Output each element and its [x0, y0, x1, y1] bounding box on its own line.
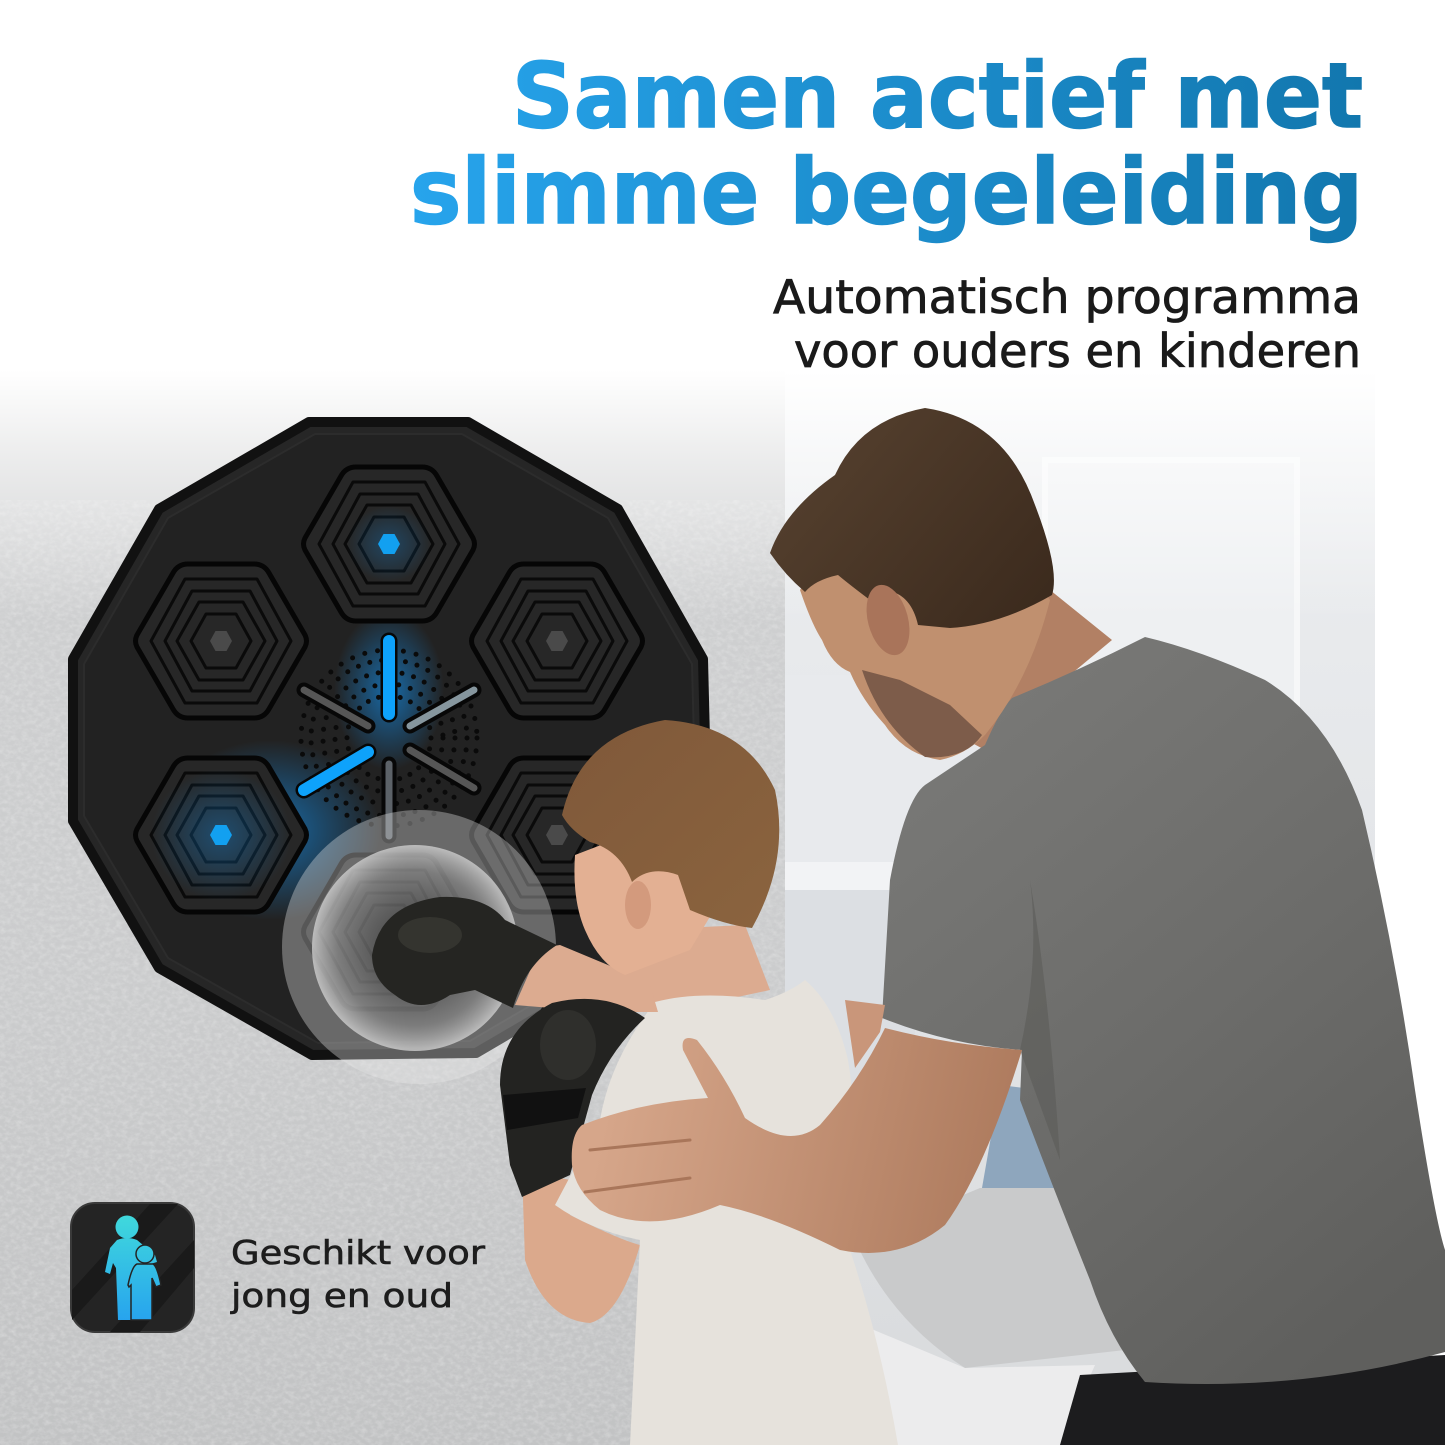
boy t-shirt [555, 980, 898, 1445]
father forearm and hand [572, 1028, 1022, 1253]
hex pad bottom [304, 855, 474, 1009]
title: slimme begeleiding [410, 140, 1363, 245]
boy lower arm [522, 1170, 640, 1323]
father head [800, 480, 1050, 760]
boy neck [615, 925, 770, 1005]
badge label [230, 1233, 485, 1315]
hex pad upper right [472, 564, 642, 718]
sofa [855, 1188, 1125, 1368]
guard glove highlight [540, 1010, 596, 1080]
hex pad lower right [472, 758, 642, 912]
finger gaps [585, 1140, 690, 1192]
father [770, 408, 1445, 1445]
boy [372, 720, 898, 1445]
hex pad top [304, 467, 474, 621]
guard glove strap [503, 1088, 586, 1130]
guard glove [500, 999, 645, 1197]
badge label: Geschikt voor [231, 1233, 485, 1272]
father hair [770, 408, 1054, 628]
punching glove [372, 897, 557, 1008]
impact pulse rings [282, 810, 556, 1084]
boy punching arm [515, 945, 658, 1012]
child figure [128, 1245, 161, 1320]
subtitle: Automatisch programma [773, 270, 1361, 324]
father beard [862, 670, 982, 757]
title [410, 44, 1363, 245]
device body [73, 422, 707, 1055]
father trousers [1060, 1355, 1445, 1445]
glow behind lit bars [160, 740, 380, 920]
shirt fold shading [1020, 880, 1060, 1160]
badge icon: parent and child [71, 1203, 194, 1332]
boy face [574, 830, 720, 975]
subtitle: voor ouders en kinderen [794, 324, 1361, 378]
speaker dots [301, 650, 477, 826]
punching glove highlight [398, 917, 462, 953]
hex pad upper left [136, 564, 306, 718]
device: boxing machine [73, 422, 707, 1055]
hex pad lower left [136, 758, 306, 912]
father arm [572, 1028, 1022, 1253]
boy hair [562, 720, 779, 928]
father shirt [882, 637, 1445, 1384]
light bars [304, 641, 474, 836]
title: Samen actief met [512, 44, 1363, 149]
parent figure [105, 1216, 157, 1320]
badge label: jong en oud [230, 1276, 453, 1315]
father ear [859, 580, 917, 660]
icon stripes [72, 1204, 194, 1332]
boy ear [625, 881, 651, 929]
subtitle [773, 270, 1361, 378]
father neck [930, 590, 1112, 750]
boy rear arm [845, 1000, 885, 1068]
